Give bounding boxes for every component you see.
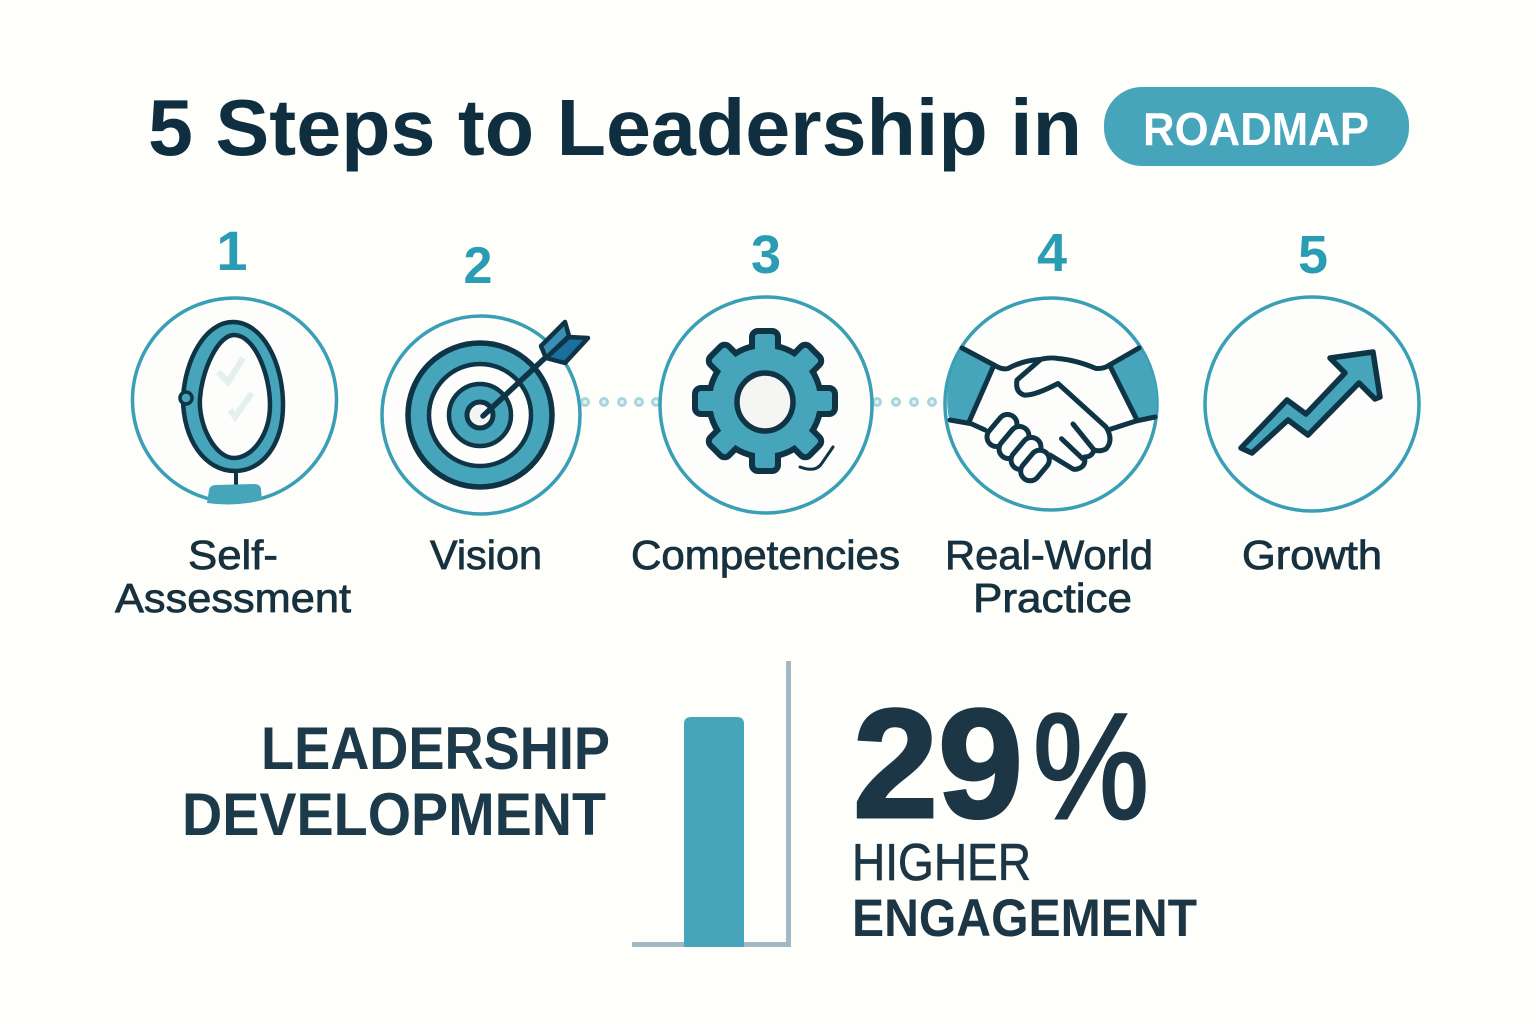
icon: growth arrow [1205, 297, 1419, 511]
label: Assessment [115, 575, 352, 621]
icon: handshake [945, 298, 1157, 510]
step number 5: 5 [1298, 225, 1328, 285]
label: Competencies [631, 532, 900, 578]
label: Self- [188, 532, 278, 578]
icon: mirror [132, 298, 336, 504]
label: Vision [430, 532, 542, 578]
connector dots: step 2 to step 3 [582, 398, 660, 406]
label [945, 532, 1153, 621]
badge: roadmap: ROADMAP [1143, 103, 1369, 155]
step number 2: 2 [464, 237, 492, 295]
label: Practice [973, 575, 1132, 621]
step 2: vision [382, 237, 588, 578]
stat: 29 percent: 29 [853, 677, 1023, 850]
step number 3: 3 [751, 225, 781, 285]
title: 5 Steps to Leadership in [148, 83, 1082, 172]
stat caption: higher engagement: ENGAGEMENT [852, 889, 1197, 948]
stat caption: higher engagement [852, 834, 1197, 948]
icon: target and arrow [382, 316, 588, 514]
stat: 29 percent [853, 677, 1149, 850]
bar chart [632, 661, 791, 947]
step number 1: 1 [216, 219, 248, 282]
step 3: competencies [631, 225, 900, 578]
icon: gear [660, 297, 872, 513]
step number 4: 4 [1037, 223, 1067, 283]
stat: 29 percent: % [1033, 682, 1149, 850]
step 5: growth [1205, 225, 1419, 578]
step 1: self-assessment [115, 219, 352, 621]
label: Growth [1242, 532, 1382, 578]
step 4: real-world practice [945, 223, 1157, 621]
heading: leadership development [182, 715, 610, 848]
connector dots: step 3 to step 4 [874, 398, 936, 406]
label [115, 532, 352, 621]
badge: roadmap [1104, 87, 1409, 166]
heading: leadership development: LEADERSHIP [261, 715, 610, 782]
heading: leadership development: DEVELOPMENT [182, 781, 606, 848]
label: Real-World [945, 532, 1153, 578]
stat caption: higher engagement: HIGHER [852, 834, 1031, 892]
